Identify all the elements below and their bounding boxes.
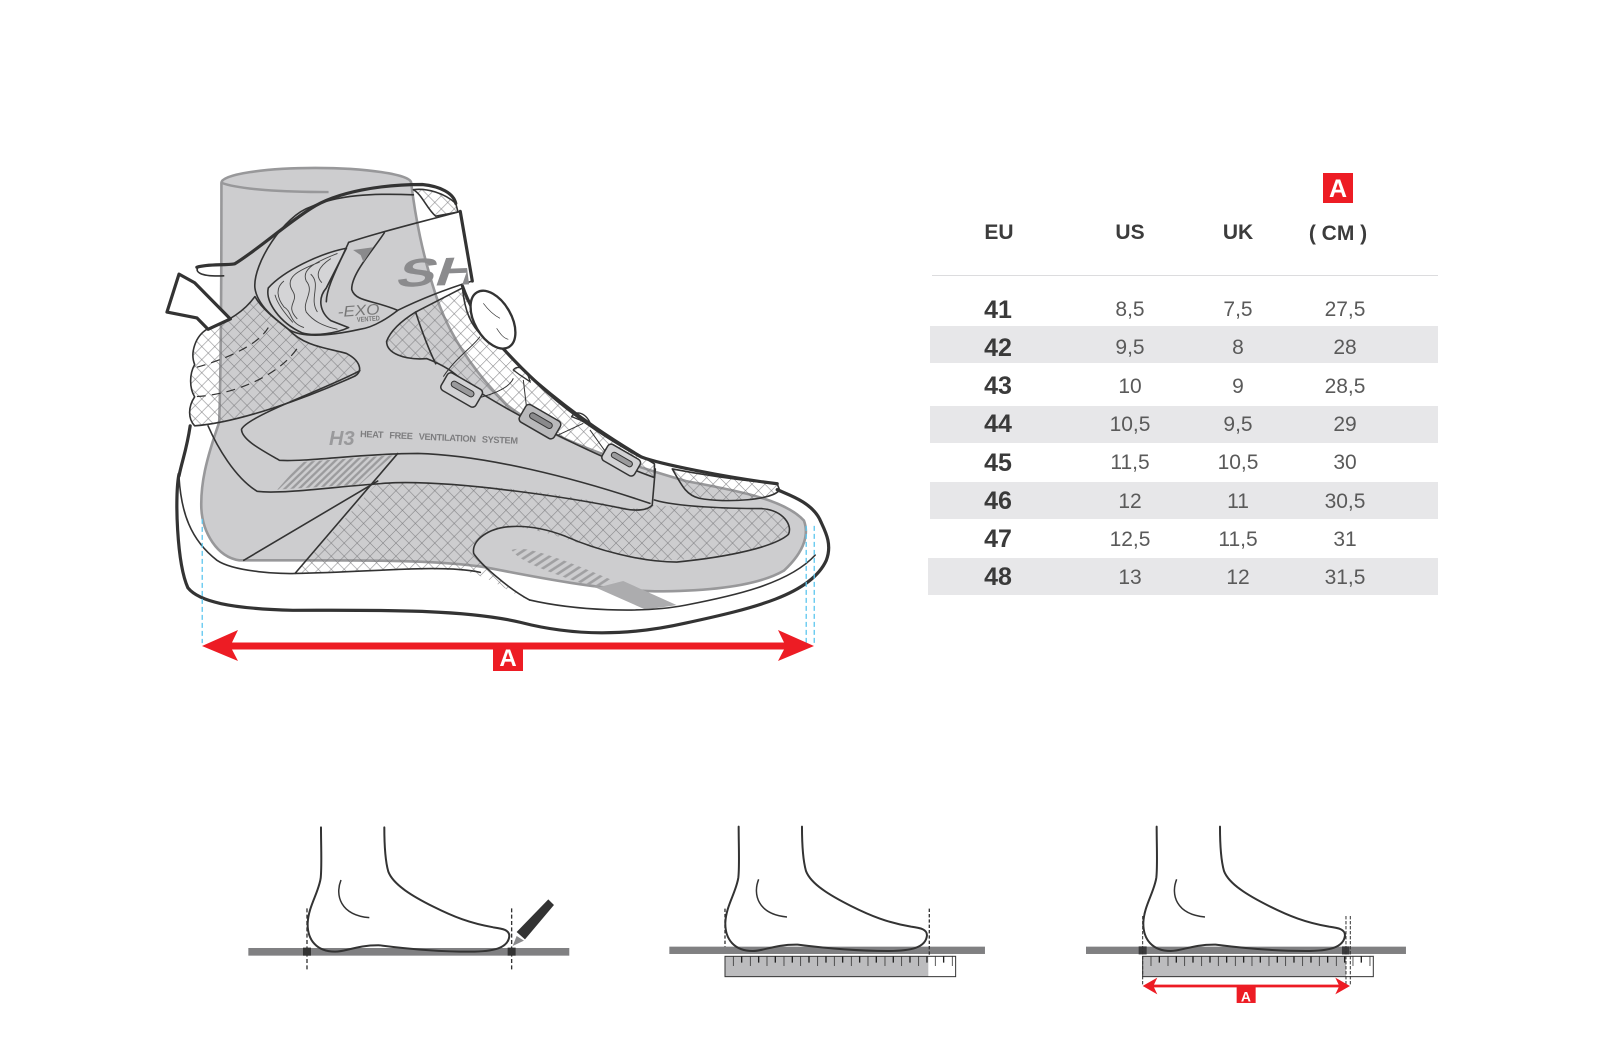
boot linework: [167, 168, 829, 643]
strap panel: [255, 194, 413, 335]
ventilation system text: HEAT FREE VENTILATION SYSTEM: [360, 429, 519, 446]
row 42: 42: [984, 334, 1012, 362]
row 48: 31,5: [1325, 566, 1365, 589]
pencil: [513, 899, 554, 946]
floor bar: [669, 947, 985, 954]
cylinder top edge: [221, 183, 329, 192]
pull tab: [167, 274, 230, 329]
blue guide lines: [202, 519, 814, 643]
row 41: 41: [984, 296, 1012, 324]
mark squares: [303, 948, 516, 956]
foot outline: [308, 827, 509, 952]
table header: [984, 221, 1367, 245]
gray band on sole: [596, 581, 677, 610]
row 47: 31: [1333, 528, 1357, 551]
ruler: [725, 956, 956, 977]
dashed guides: [725, 909, 929, 957]
row 44: 44: [984, 410, 1012, 438]
body side panel: [242, 371, 650, 503]
inner sole line: [179, 478, 815, 610]
lace guide three: [600, 443, 642, 478]
row 42: 28: [1333, 336, 1357, 359]
lower side panel: [208, 426, 655, 510]
A letter: A: [1329, 175, 1347, 203]
heel back outline: [179, 426, 190, 476]
step 3: read length A: [1086, 827, 1406, 1004]
red dimension arrow: [202, 630, 814, 672]
hatched heel padding: [190, 297, 360, 426]
row 44: 10,5: [1110, 413, 1150, 436]
arrow shape: [202, 630, 814, 661]
hatched lower side mesh: [295, 482, 789, 600]
foot outline: [725, 827, 927, 951]
row 48: 48: [984, 563, 1012, 591]
row 45: 10,5: [1218, 451, 1258, 474]
boot upper outline: [197, 184, 456, 267]
foot form silhouette: [201, 168, 806, 591]
row 44: 29: [1333, 413, 1357, 436]
H3 logo: H3: [329, 428, 355, 450]
hatched tongue strip: [387, 288, 654, 478]
row 43: 43: [984, 372, 1012, 400]
dial: [461, 283, 525, 356]
lace guide one: [439, 371, 484, 409]
toe side line: [473, 500, 789, 600]
row 48: [928, 558, 1438, 595]
row 46: 11: [1227, 490, 1249, 513]
diagonal seams: [244, 453, 398, 573]
step 1: mark the foot: [248, 827, 569, 970]
row 46: [930, 482, 1438, 519]
lace guide loops: [513, 367, 592, 427]
row 45: 45: [984, 449, 1012, 477]
floor bar: [248, 948, 569, 956]
window panel: [326, 233, 398, 310]
floor bar: [1086, 947, 1406, 954]
mark squares: [1139, 946, 1349, 954]
row 48: 12: [1226, 566, 1250, 589]
row 43: 9: [1232, 375, 1244, 398]
lace guide two: [518, 403, 562, 440]
row 45: 30: [1333, 451, 1357, 474]
boot logo mark: [353, 247, 373, 262]
row 45: 11,5: [1110, 451, 1150, 474]
A badge: [1323, 173, 1353, 203]
row 41: [984, 296, 1365, 324]
tongue inner line: [416, 288, 483, 364]
table header: EU: [984, 221, 1014, 244]
row 41: 7,5: [1223, 298, 1253, 321]
row 43: 10: [1118, 375, 1142, 398]
loop: [197, 267, 224, 276]
row 47: [984, 525, 1357, 553]
hatched collar: [413, 189, 458, 216]
A letter: A: [1241, 988, 1251, 1004]
strap thick end: [460, 211, 472, 281]
row 41: 8,5: [1115, 298, 1145, 321]
row 42: [930, 326, 1438, 363]
lace lines: [443, 337, 607, 453]
instep outline: [462, 286, 777, 484]
row 45: [984, 449, 1357, 477]
step 2: ruler under the foot: [669, 827, 985, 977]
dial details: [483, 303, 508, 339]
row 48: 13: [1118, 566, 1142, 589]
row 44: [930, 406, 1438, 443]
A badge: [493, 644, 523, 671]
brand text on strap: SH: [391, 248, 487, 296]
toe cap: [672, 469, 779, 501]
row 47: 12,5: [1110, 528, 1150, 551]
A badge: [1237, 987, 1256, 1003]
row 47: 11,5: [1218, 528, 1258, 551]
lacing system: [439, 283, 642, 478]
stripe block on ankle: [277, 455, 393, 490]
strap band: [349, 211, 472, 310]
ruler: [1143, 956, 1373, 977]
header rule: [932, 275, 1438, 276]
table header: US: [1115, 221, 1145, 244]
row 43: 28,5: [1325, 375, 1365, 398]
dashed guides: [307, 908, 512, 970]
row 43: [984, 372, 1365, 400]
red arrow: [1143, 978, 1350, 994]
A letter: A: [499, 645, 517, 672]
row 46: 12: [1118, 490, 1142, 513]
stripe block on sole: [512, 549, 614, 588]
topographic contours: [275, 253, 337, 329]
EXO label: -EXO: [337, 301, 381, 321]
vented label: VENTED: [357, 315, 380, 324]
heel stitching: [197, 328, 300, 397]
row 47: 47: [984, 525, 1012, 553]
boot illustration: [167, 168, 829, 672]
table header: ( CM ): [1309, 222, 1367, 245]
row 42: 8: [1232, 336, 1244, 359]
dashed guides: [1143, 916, 1350, 985]
row 46: 30,5: [1325, 490, 1365, 513]
sole outline: [177, 474, 829, 633]
row 41: 27,5: [1325, 298, 1365, 321]
topographic patch: [268, 248, 349, 334]
row 46: 46: [984, 487, 1012, 515]
foot outline: [1143, 827, 1345, 951]
row 42: 9,5: [1115, 336, 1145, 359]
size table: [928, 173, 1438, 595]
row 44: 9,5: [1223, 413, 1253, 436]
table header: UK: [1223, 221, 1253, 244]
